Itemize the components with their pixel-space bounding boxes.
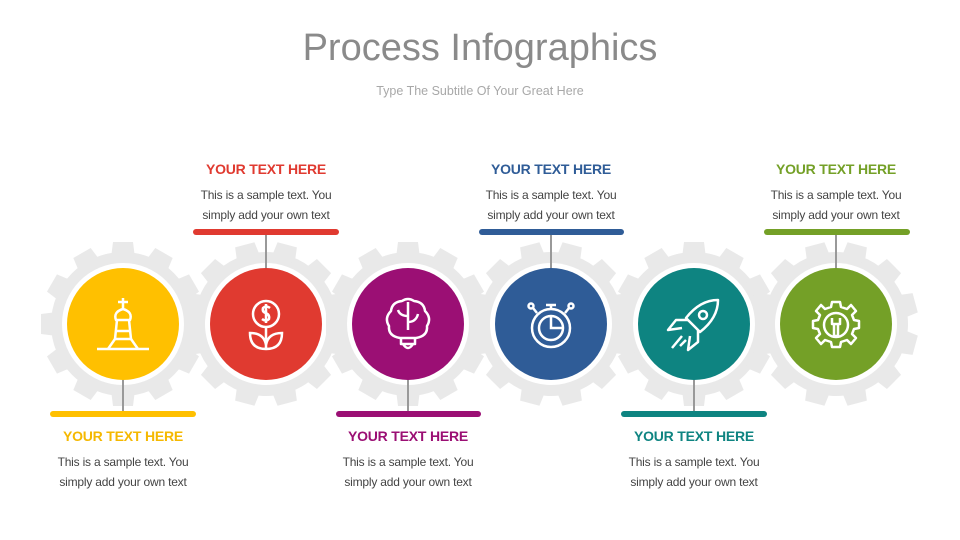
text block 6: simply add your own text bbox=[772, 208, 900, 222]
text block 2: This is a sample text. You bbox=[201, 188, 331, 202]
text block 3 bbox=[342, 428, 473, 489]
text block 2: YOUR TEXT HERE bbox=[206, 161, 326, 177]
text block 4: This is a sample text. You bbox=[486, 188, 616, 202]
text block 5 bbox=[628, 428, 759, 489]
text block 1: simply add your own text bbox=[59, 475, 187, 489]
text block 5: simply add your own text bbox=[630, 475, 758, 489]
text block 2: simply add your own text bbox=[202, 208, 330, 222]
text block 2 bbox=[200, 161, 331, 222]
text block 6 bbox=[770, 161, 901, 222]
text block 3: YOUR TEXT HERE bbox=[348, 428, 468, 444]
text block 1: YOUR TEXT HERE bbox=[63, 428, 183, 444]
gear backgrounds bbox=[41, 224, 936, 424]
connectors and bars bbox=[53, 232, 907, 414]
text block 1 bbox=[58, 428, 188, 489]
step 1 circle: chess king bbox=[67, 268, 179, 380]
text block 5: YOUR TEXT HERE bbox=[634, 428, 754, 444]
text block 3: simply add your own text bbox=[344, 475, 472, 489]
text block 4: YOUR TEXT HERE bbox=[491, 161, 611, 177]
text block 5: This is a sample text. You bbox=[629, 455, 759, 469]
step 4 circle: stopwatch bbox=[495, 268, 607, 380]
step 3 circle: brain bulb bbox=[352, 268, 464, 380]
text block 1: This is a sample text. You bbox=[58, 455, 188, 469]
step 6 circle: gear wrench bbox=[780, 268, 892, 380]
text block 6: This is a sample text. You bbox=[771, 188, 901, 202]
text block 3: This is a sample text. You bbox=[343, 455, 473, 469]
title: Process Infographics bbox=[303, 27, 657, 69]
step 5 circle: rocket bbox=[638, 268, 750, 380]
text block 4: simply add your own text bbox=[487, 208, 615, 222]
text block 6: YOUR TEXT HERE bbox=[776, 161, 896, 177]
step 2 circle: money plant bbox=[210, 268, 322, 380]
subtitle: Type The Subtitle Of Your Great Here bbox=[376, 84, 584, 98]
text block 4 bbox=[486, 161, 616, 222]
